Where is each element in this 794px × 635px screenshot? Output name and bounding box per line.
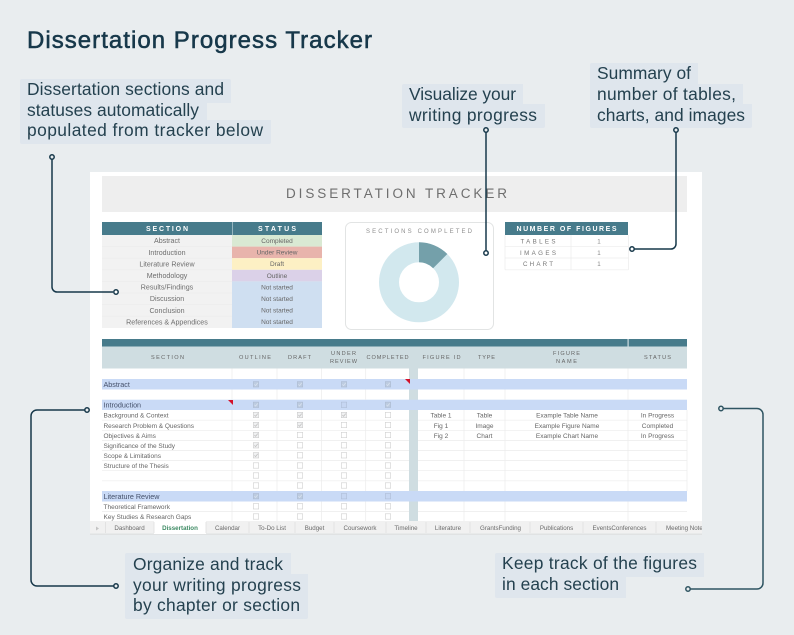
callout: visualize progress: Visualize your [409,84,516,104]
callout: sections and statuses: statuses automatically [27,100,199,120]
heading: dissertation tracker band [102,176,687,212]
table: main tracker: Fig 1 [434,423,449,430]
table: main tracker: DRAFT [288,355,312,361]
table: section status: Not started [261,296,293,303]
callout: organize and track: by chapter or section [133,595,300,615]
callout: visualize progress [402,84,545,128]
callout: summary of figures [590,63,752,128]
table: main tracker: In Progress [641,413,675,420]
table: section status [102,222,322,328]
table: number of figures: 1 [597,238,601,245]
callout: visualize progress: writing progress [408,105,537,125]
table: number of figures: TABLES [520,238,556,245]
table: main tracker: Objectives & Aims [104,433,157,440]
table: main tracker: Chart [477,433,493,440]
table: section status: Draft [270,261,284,268]
table: main tracker: Structure of the Thesis [104,463,170,470]
sheet tabs bar: EventsConferences [592,525,646,532]
table: section status: Conclusion [149,307,185,315]
callout: organize and track: your writing progress [133,575,301,595]
table: main tracker: Table [477,413,493,420]
table: main tracker: Example Chart Name [536,433,598,440]
table: section status: Not started [261,308,293,315]
callout: summary of figures: charts, and images [597,105,745,125]
arrow: figures callout to figure columns [686,406,763,591]
callout: keep track of figures [495,553,704,598]
table: main tracker: Background & Context [104,413,169,420]
arrow: summary callout to figures table [630,128,678,251]
table: main tracker: UNDER [331,351,356,357]
table: section status: Introduction [148,249,186,257]
table: main tracker: SECTION [151,355,184,361]
table: main tracker: Scope & Limitations [104,453,162,460]
table: main tracker: TYPE [478,355,495,361]
table: section status: Completed [261,238,293,245]
table: main tracker: Completed [642,423,674,430]
callout: keep track of figures: Keep track of the figures [502,553,697,573]
table: section status: Not started [261,284,293,291]
callout: organize and track: Organize and track [133,554,283,574]
table: main tracker: Fig 2 [434,433,449,440]
table: main tracker: Example Table Name [536,413,598,420]
table: main tracker: NAME [556,359,577,365]
sheet tabs bar [90,521,706,535]
table: main tracker: Example Figure Name [535,423,600,430]
table: section status: Under Review [257,250,298,257]
callout: keep track of figures: in each section [502,574,619,594]
sheet tabs bar: Literature [435,525,462,532]
table: number of figures: 1 [597,250,601,257]
table: number of figures: NUMBER OF FIGURES [516,226,617,233]
table: main tracker: Key Studies & Research Gaps [104,514,192,521]
table: section status: Discussion [150,295,184,303]
sheet tabs bar: Timeline [394,525,418,532]
table: main tracker: FIGURE ID [422,355,460,361]
table: section status: Results/Findings [141,284,194,292]
table: section status: SECTION [146,226,188,233]
sheet tabs bar: Coursework [343,525,377,532]
table: section status: STATUS [258,226,296,233]
callout: summary of figures: number of tables, [597,84,736,104]
table: main tracker: Theoretical Framework [104,504,171,511]
sheet tabs bar: Dissertation [162,525,198,532]
panel: spreadsheet [90,172,706,535]
table: main tracker: Research Problem & Questions [104,423,195,430]
arrow: sections callout to status table [50,155,118,294]
chart: sections completed donut: SECTIONS COMPLETED [366,229,473,235]
table: number of figures: IMAGES [520,250,556,257]
table: main tracker: STATUS [644,355,671,361]
callout: organize and track [125,553,308,619]
sheet tabs bar: Budget [305,525,325,532]
table: main tracker: Significance of the Study [104,443,176,450]
table: main tracker: Introduction [104,401,141,410]
callout: sections and statuses [20,79,271,144]
sheet tabs bar: To-Do List [258,525,286,532]
table: section status: Literature Review [139,260,195,268]
callout: sections and statuses: Dissertation sections and [27,79,224,99]
sheet tabs bar: Calendar [215,525,240,532]
arrow: visualize callout to donut [484,128,488,255]
table: main tracker: REVIEW [330,359,358,365]
table: main tracker: Abstract [104,380,130,389]
table: section status: References & Appendices [126,318,208,326]
table: main tracker: Image [475,423,494,430]
table: section status: Not started [261,319,293,326]
table: main tracker: In Progress [641,433,675,440]
table: main tracker: Table 1 [431,413,452,420]
callout: summary of figures: Summary of [597,63,691,83]
callout: sections and statuses: populated from tracker below [27,120,263,140]
table: number of figures: 1 [597,261,601,268]
table: number of figures [505,222,628,270]
table: main tracker: Literature Review [104,492,160,501]
table: number of figures: CHART [523,261,553,268]
table: main tracker: FIGURE [553,351,580,357]
chart: sections completed donut [346,222,494,330]
table: main tracker [102,339,687,522]
heading: dissertation tracker band: DISSERTATION TRACKER [286,186,507,201]
title: Dissertation Progress Tracker [27,27,372,54]
sheet tabs bar: Dashboard [114,525,145,532]
arrow: organize callout to tracker rows [31,408,118,588]
sheet tabs bar: Publications [540,525,573,532]
sheet tabs bar: Meeting Notes [666,525,706,532]
table: section status: Abstract [154,237,180,245]
table: main tracker: COMPLETED [366,355,408,361]
table: section status: Outline [267,273,288,280]
table: section status: Methodology [147,272,188,280]
table: main tracker: OUTLINE [239,355,271,361]
sheet tabs bar: GrantsFunding [480,525,522,532]
